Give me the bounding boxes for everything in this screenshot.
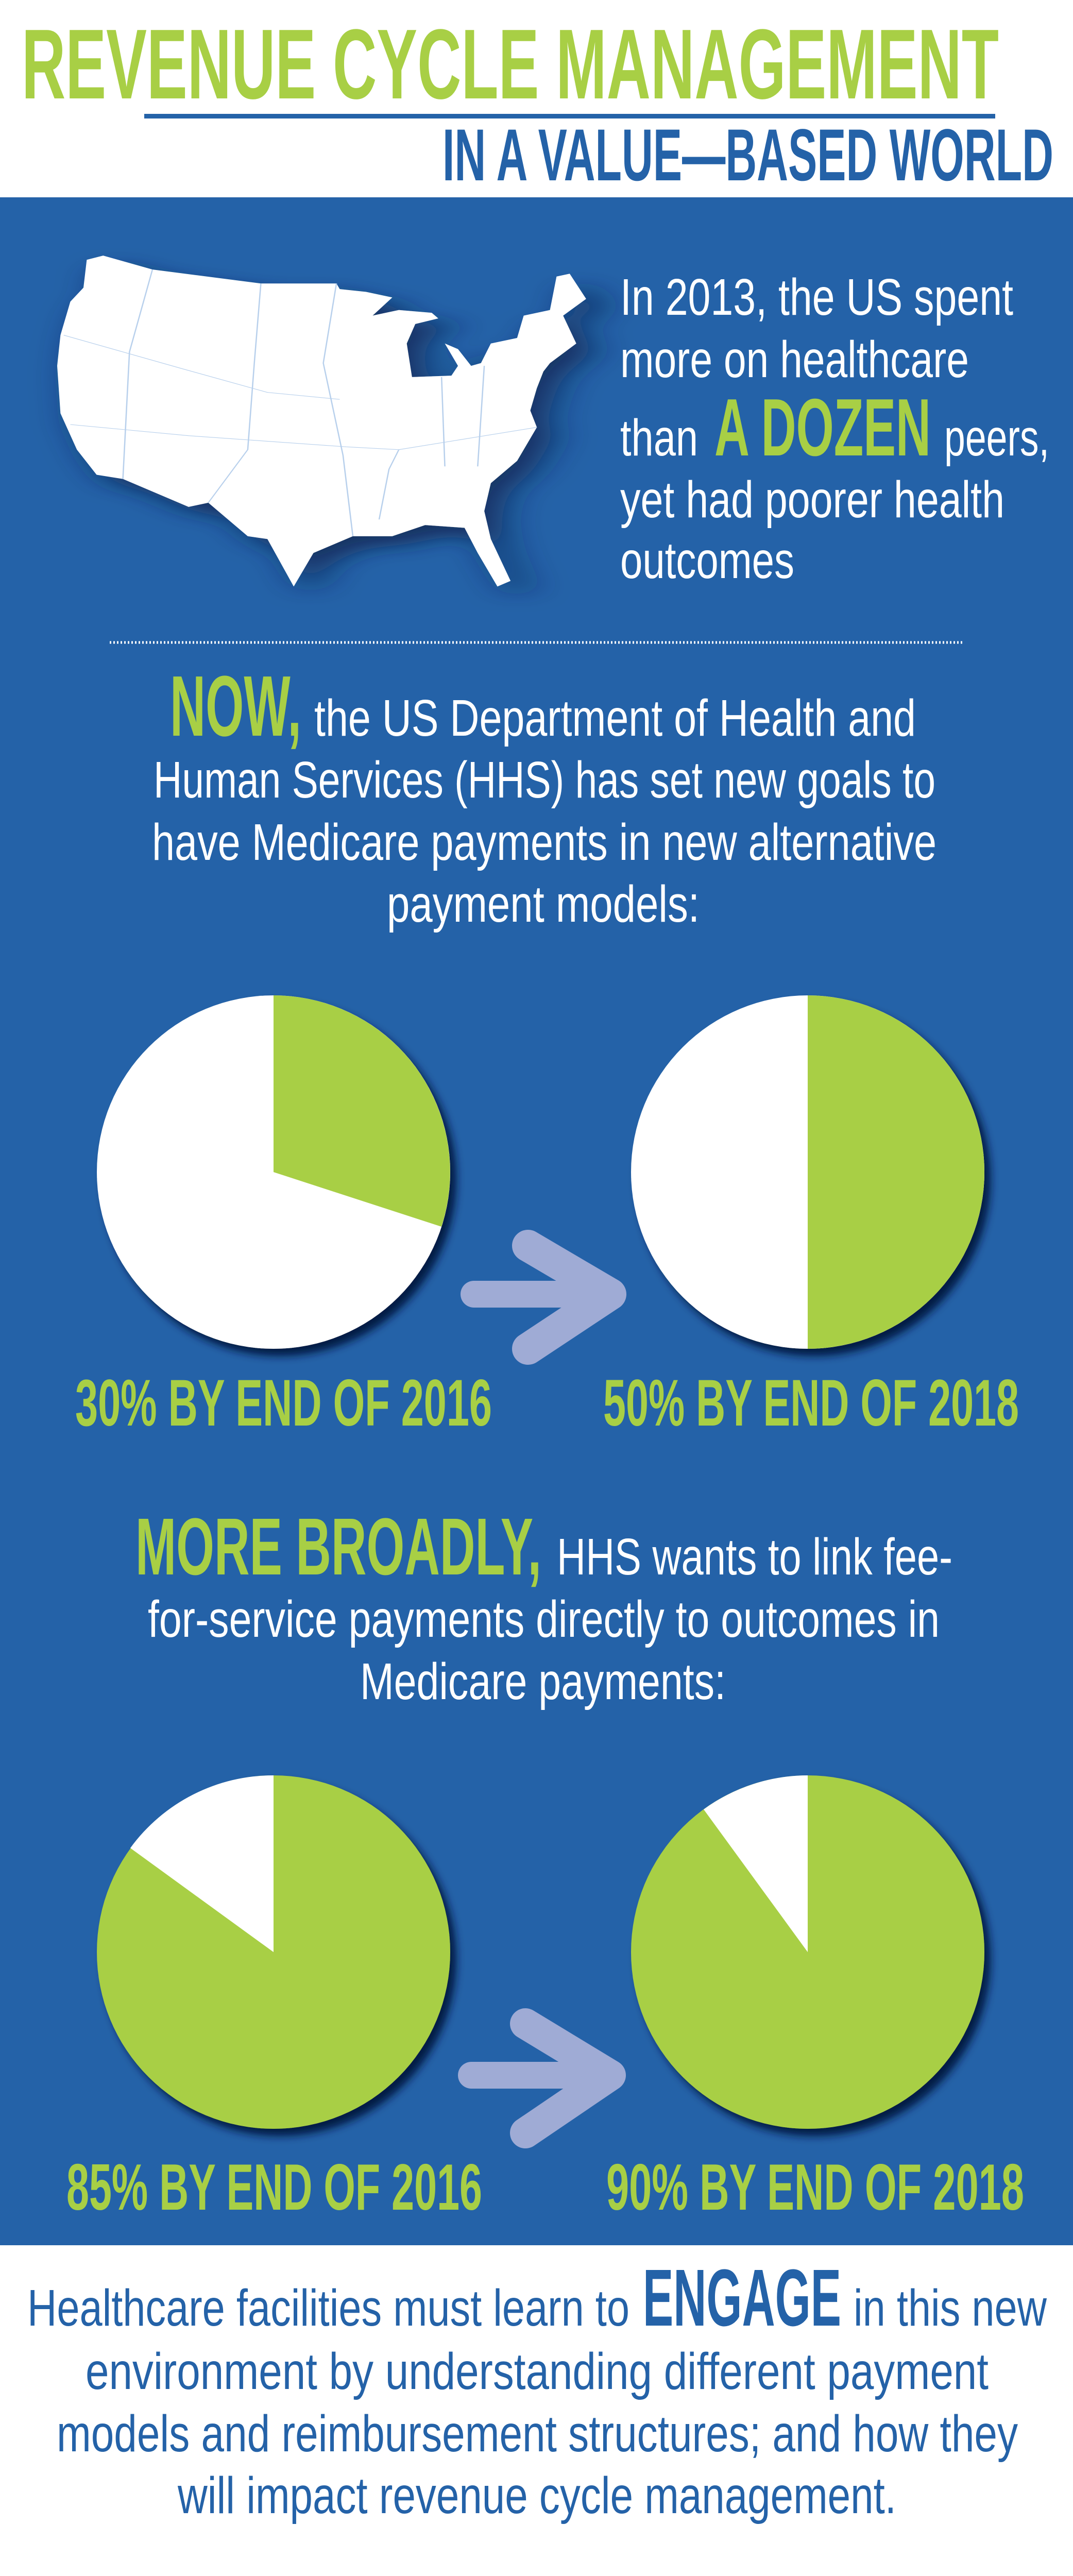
text: NOW paragraph	[152, 658, 936, 933]
pie chart: 30% by 2016	[97, 995, 450, 1349]
text: NOW paragraph: NOW,	[170, 658, 301, 754]
title	[22, 8, 1053, 196]
pie chart: 85% by 2016	[97, 1775, 450, 2129]
text: 2013 healthcare spend: more on healthcare	[620, 331, 969, 388]
text: 2013 healthcare spend: A DOZEN	[714, 382, 931, 473]
arrow 1	[474, 1246, 610, 1349]
text: MORE BROADLY paragraph	[135, 1502, 952, 1710]
pie chart: 50% by 2018	[631, 995, 984, 1349]
text: 2013 healthcare spend: than	[620, 409, 698, 467]
text: 2013 healthcare spend	[620, 268, 1049, 589]
text: engage conclusion	[27, 2253, 1047, 2524]
text: MORE BROADLY paragraph: HHS wants to link fee-	[557, 1528, 952, 1586]
label: 85%: 85% BY END OF 2016	[66, 2150, 482, 2224]
text: MORE BROADLY paragraph: MORE BROADLY,	[135, 1502, 541, 1592]
text: engage conclusion: ENGAGE	[643, 2253, 841, 2343]
text: MORE BROADLY paragraph: Medicare payments:	[360, 1653, 726, 1710]
text: engage conclusion: will impact revenue cycle management.	[177, 2467, 896, 2524]
label: 30%: 30% BY END OF 2016	[75, 1366, 492, 1440]
arrow 2	[471, 2024, 610, 2133]
text: NOW paragraph: payment models:	[387, 875, 700, 933]
text: NOW paragraph: the US Department of Health and	[314, 689, 916, 747]
map of US	[57, 256, 586, 586]
text: engage conclusion: Healthcare facilities must learn to	[27, 2279, 629, 2337]
panel: blue background	[0, 197, 1073, 2245]
text: 2013 healthcare spend: outcomes	[620, 532, 794, 589]
pie chart: 90% by 2018	[631, 1775, 984, 2129]
